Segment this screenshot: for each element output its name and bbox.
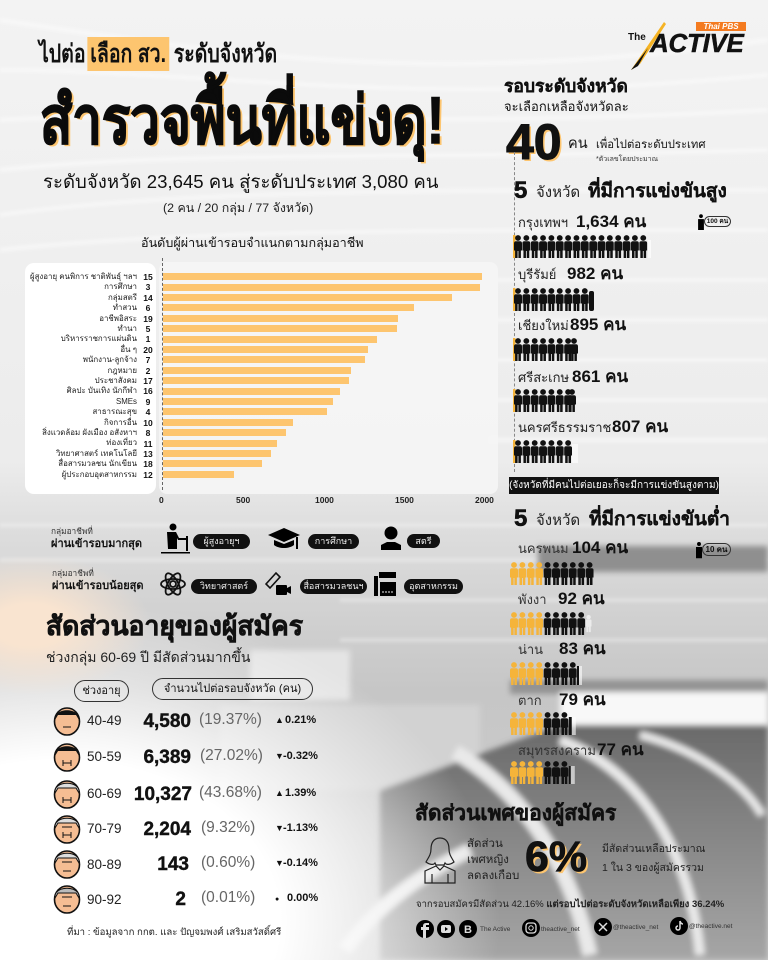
chart category labels: กิจการอื่น — [104, 418, 137, 427]
panel: label card — [25, 263, 156, 494]
icon: instagram — [522, 919, 540, 937]
row: Nakhon Si Thammarat: 807 คน — [612, 417, 668, 436]
change: -1.13% — [283, 822, 318, 834]
chart group numbers: 10 — [143, 418, 153, 428]
row: 90-92 — [54, 885, 318, 914]
low competition heading: จังหวัด — [536, 512, 580, 529]
chart category labels: สาธารณะสุข — [92, 407, 137, 416]
chart category labels: ผู้ประกอบอุตสาหกรรม — [62, 470, 137, 479]
change: -0.14% — [283, 857, 318, 869]
icon: blockdit — [459, 920, 477, 938]
title block — [37, 37, 444, 216]
text: share — [467, 836, 519, 884]
row: Buriram: 982 คน — [567, 264, 623, 283]
low competition heading — [514, 504, 754, 536]
change: ▼ — [275, 858, 284, 868]
legend: 100 people: 100 คน — [707, 218, 728, 225]
chart group numbers: 7 — [146, 355, 150, 365]
pill: science: วิทยาศาสตร์ — [200, 581, 248, 591]
chart group numbers — [143, 272, 153, 480]
age: 90-92 — [87, 892, 122, 907]
chart category labels: พนักงาน-ลูกจ้าง — [83, 355, 137, 364]
row: Phang Nga: พังงา — [518, 592, 547, 607]
chart group numbers: 12 — [143, 470, 153, 480]
pct: (0.60%) — [201, 854, 255, 871]
change: ▼ — [275, 823, 284, 833]
chart x axis: 0 — [159, 495, 164, 505]
legend: 100 people — [698, 214, 732, 230]
row: Samut Songkhram — [509, 737, 679, 785]
icon: woman outline — [422, 836, 458, 884]
row: Nakhon Phanom: 104 คน — [572, 538, 628, 557]
province rows low — [509, 538, 679, 788]
low competition heading: ที่มีการแข่งขันต่ำ — [589, 509, 730, 530]
age: 80-89 — [87, 857, 122, 872]
row: Tak — [509, 688, 679, 736]
row: Bangkok — [512, 210, 657, 260]
chart category labels: กลุ่มสตรี — [108, 293, 137, 302]
count: 4,580 — [143, 711, 191, 732]
pct: (0.01%) — [201, 889, 255, 906]
row: Samut Songkhram: 77 คน — [597, 740, 644, 759]
text: group note: (2 คน / 20 กลุ่ม / 77 จังหวัด) — [163, 201, 313, 215]
chart group numbers: 14 — [143, 293, 153, 303]
count: 143 — [157, 854, 189, 875]
row: Phang Nga — [509, 588, 679, 636]
pill: education: การศึกษา — [315, 536, 352, 546]
chart x axis: 500 — [236, 495, 250, 505]
high competition heading: จังหวัด — [536, 184, 580, 201]
change: 0.21% — [285, 714, 316, 726]
row: Chiang Mai — [512, 315, 657, 360]
chart group numbers: 9 — [146, 397, 150, 407]
text: ratio: มีสัดส่วนเหลือประมาณ — [602, 843, 705, 855]
column pill: count — [152, 678, 313, 700]
chart group numbers: 1 — [146, 334, 150, 344]
chart category labels: ผู้สูงอายุ คนพิการ ชาติพันธุ์ ฯลฯ — [30, 272, 137, 281]
heading: subtitle line: ไปต่อ เลือก สว. ระดับจังหวัด — [39, 40, 277, 68]
chart category labels: SMEs — [116, 397, 137, 406]
chart category labels: ท่องเที่ยว — [106, 438, 137, 447]
label: @theactive_net — [613, 924, 658, 931]
dashed axis — [514, 152, 515, 472]
heading: gender share: สัดส่วนเพศของผู้สมัคร — [415, 802, 616, 825]
chart category labels: วิทยาศาสตร์ เทคโนโลยี — [56, 449, 137, 458]
heading: main title: สำรวจพื้นที่แข่งดุ! — [40, 83, 444, 157]
icon: elderly — [161, 524, 190, 554]
note: เพื่อไปต่อระดับประเทศ — [596, 139, 706, 151]
pill: education — [308, 534, 359, 549]
chart group numbers: 15 — [143, 272, 153, 282]
pill: elderly — [193, 534, 250, 549]
chart group numbers: 11 — [144, 438, 152, 448]
count: 6,389 — [143, 747, 191, 768]
chart category labels: ประชาสังคม — [95, 376, 137, 385]
chart group numbers: 16 — [143, 386, 153, 396]
icon: x — [594, 918, 612, 936]
heading: รอบระดับจังหวัด — [504, 76, 628, 96]
chart group numbers: 13 — [143, 449, 153, 459]
age: 70-79 — [87, 821, 122, 836]
panel: most passed groups — [51, 524, 440, 554]
chart group numbers: 8 — [146, 428, 150, 438]
callout: black banner — [509, 477, 719, 494]
legend: 10 people — [696, 540, 732, 560]
column pill: count: จำนวนไปต่อรอบจังหวัด (คน) — [164, 683, 301, 695]
pct: (43.68%) — [199, 784, 262, 801]
pill: industry: อุตสาหกรรม — [409, 581, 458, 591]
chart category labels: อาชีพอิสระ — [99, 314, 137, 323]
age: 60-69 — [87, 786, 122, 801]
subheading: ช่วงกลุ่ม 60-69 ปี มีสัดส่วนมากขึ้น — [46, 649, 250, 665]
icon: factory — [374, 572, 396, 596]
age: 40-49 — [87, 713, 122, 728]
pill: women: สตรี — [415, 536, 432, 546]
chart x axis: 1500 — [395, 495, 414, 505]
icon: face — [54, 707, 80, 736]
panel: age share — [46, 611, 318, 938]
text: จะเลือกเหลือจังหวัดละ — [504, 99, 629, 114]
chart category labels: ทำนา — [118, 324, 137, 333]
footnote: *ตัวเลขโดยประมาณ — [596, 156, 658, 163]
label: ผ่านเข้ารอบน้อยสุด — [52, 580, 144, 592]
high competition heading — [514, 177, 727, 204]
white fade: lower left — [0, 600, 768, 960]
row: Sisaket — [512, 366, 657, 411]
logo active: ACTIVE — [650, 28, 744, 58]
column pill: age — [74, 680, 129, 702]
change: ▲ — [275, 715, 284, 725]
row: 70-79 — [54, 815, 318, 844]
chart title: อันดับผู้ผ่านเข้ารอบจำแนกตามกลุ่มอาชีพ — [141, 236, 364, 250]
legend: 10 people: 10 คน — [706, 545, 727, 554]
row: Chiang Mai: 895 คน — [570, 315, 626, 334]
panel: bar chart — [25, 263, 498, 494]
icon: face — [54, 885, 80, 914]
icon: woman — [381, 526, 401, 550]
row: 60-69 — [54, 780, 316, 809]
count: 2 — [175, 889, 186, 910]
high competition heading: ที่มีการแข่งขันสูง — [588, 181, 727, 202]
province rows high — [512, 210, 752, 470]
chart group numbers: 20 — [143, 345, 153, 355]
chart group numbers: 4 — [146, 407, 150, 417]
label — [52, 568, 144, 592]
row: Sisaket: 861 คน — [572, 367, 628, 386]
social row — [416, 918, 736, 942]
chart bars — [163, 273, 482, 478]
row: Buriram — [512, 265, 657, 310]
pill: elderly: ผู้สูงอายุฯ — [204, 536, 239, 546]
row: Nakhon Phanom: นครพนม — [518, 541, 569, 556]
panel: plot area — [159, 262, 498, 494]
row: Nakhon Si Thammarat — [512, 417, 672, 462]
chart group numbers: 5 — [146, 324, 150, 334]
chart category labels — [30, 272, 137, 480]
row: Samut Songkhram: สมุทรสงคราม — [518, 743, 596, 758]
pill: industry — [404, 579, 463, 594]
chart category labels: การศึกษา — [104, 282, 137, 291]
chart category labels: กฎหมาย — [107, 366, 137, 375]
logo badge: Thai PBS — [703, 22, 739, 31]
row: Nan — [509, 638, 679, 686]
chart category labels: บริหารราชการแผ่นดิน — [61, 334, 137, 343]
icon: blockdit: B — [464, 924, 472, 936]
logo the: The — [628, 32, 646, 43]
logo slash — [631, 22, 666, 70]
icon: facebook — [416, 920, 434, 938]
label: กลุ่มอาชีพที่ — [51, 526, 93, 536]
chart category labels: ศิลปะ บันเทิง นักกีฬา — [67, 386, 137, 395]
chart x axis: 1000 — [315, 495, 334, 505]
row: Nan: น่าน — [518, 642, 543, 657]
icon: education — [268, 528, 300, 549]
change: 1.39% — [285, 787, 316, 799]
change: ▲ — [275, 788, 284, 798]
big number: 40 — [506, 114, 562, 170]
change: 0.00% — [287, 892, 318, 904]
column pill: age: ช่วงอายุ — [82, 685, 121, 697]
icon: face — [54, 815, 80, 844]
change: ● — [275, 896, 279, 903]
text: share: ลดลงเกือบ — [467, 870, 519, 882]
chart category labels: อื่น ๆ — [120, 345, 137, 354]
chart x axis: 2000 — [475, 495, 494, 505]
pct: (27.02%) — [200, 747, 263, 764]
text: detail: จากรอบสมัครมีสัดส่วน 42.16% แต่รอบไปต่อระดับจังหวัดเหลือเพียง 36.24% — [416, 899, 724, 910]
label: กลุ่มอาชีพที่ — [52, 568, 94, 578]
age: 50-59 — [87, 749, 122, 764]
row: 80-89 — [54, 850, 318, 879]
row: Sisaket: ศรีสะเกษ — [518, 370, 569, 385]
row: Phang Nga: 92 คน — [558, 589, 605, 608]
chart group numbers: 6 — [146, 303, 150, 313]
chart category labels: ทำสวน — [113, 303, 137, 312]
beige glow: left wall — [0, 555, 150, 695]
text: ratio: 1 ใน 3 ของผู้สมัครรวม — [602, 862, 704, 874]
big percent: 6% — [525, 833, 587, 881]
pct: (9.32%) — [201, 819, 255, 836]
unit: คน — [568, 136, 588, 152]
label: The Active — [480, 926, 510, 933]
change: -0.32% — [283, 750, 318, 762]
low competition heading: 5 — [514, 505, 527, 532]
text: share: สัดส่วน — [467, 838, 503, 850]
pill: mass media: สื่อสารมวลชนฯ — [303, 581, 364, 591]
text: level counts: ระดับจังหวัด 23,645 คน สู่ระดับประเทศ 3,080 คน — [43, 171, 439, 192]
chart axis line — [162, 258, 163, 490]
source: ที่มา : ข้อมูลจาก กกต. และ ปัญจมพงศ์ เสริมสวัสดิ์ศรี — [67, 927, 281, 938]
icon: youtube — [437, 920, 455, 938]
icon: face — [54, 850, 80, 879]
count: 10,327 — [134, 784, 192, 805]
pct: (19.37%) — [199, 711, 262, 728]
panel: least passed groups — [52, 568, 463, 596]
icon: face — [54, 780, 80, 809]
chart x axis — [159, 495, 494, 505]
pill: science — [191, 579, 257, 594]
chart category labels: สื่อสารมวลชน นักเขียน — [58, 459, 137, 468]
icon: atom — [160, 572, 186, 596]
row: Tak: ตาก — [518, 693, 542, 708]
row: Nakhon Si Thammarat: นครศรีธรรมราช — [518, 420, 611, 435]
count: 2,204 — [143, 819, 191, 840]
row: Nakhon Phanom — [509, 538, 679, 586]
label: @theactive.net — [689, 923, 732, 930]
icon: tiktok — [670, 917, 688, 935]
chart group numbers: 18 — [143, 459, 153, 469]
row: 40-49 — [54, 707, 316, 736]
text: ratio — [602, 840, 705, 878]
change: ▼ — [275, 751, 284, 761]
icon: microphone camera — [265, 572, 291, 595]
heading: age share: สัดส่วนอายุของผู้สมัคร — [46, 611, 303, 641]
text: share: เพศหญิง — [467, 854, 509, 866]
row: Chiang Mai: เชียงใหม่ — [518, 318, 569, 333]
pill: mass media — [300, 579, 367, 594]
logo: The Active — [628, 22, 746, 70]
row: 50-59 — [54, 743, 318, 772]
high competition heading: 5 — [514, 177, 527, 204]
chart group numbers: 3 — [146, 282, 150, 292]
chart group numbers: 19 — [143, 314, 153, 324]
row: Bangkok: กรุงเทพฯ — [518, 215, 568, 230]
row: Tak: 79 คน — [559, 690, 606, 709]
callout: black banner: (จังหวัดที่มีคนไปต่อเยอะก็จะมีการแข่งขันสูงตาม) — [509, 480, 719, 491]
chart group numbers: 2 — [146, 366, 150, 376]
chart category labels: สิ่งแวดล้อม ผังเมือง อสังหาฯ — [42, 428, 137, 437]
row: Nan: 83 คน — [559, 639, 606, 658]
chart group numbers: 17 — [143, 376, 153, 386]
label: ผ่านเข้ารอบมากสุด — [51, 538, 142, 550]
label: theactive_net — [541, 926, 580, 933]
icon: face — [54, 743, 80, 772]
row: Buriram: บุรีรัมย์ — [518, 267, 556, 282]
panel: provincial round — [504, 76, 706, 170]
panel: gender share — [414, 800, 754, 950]
label — [51, 526, 142, 550]
pill: women — [407, 534, 440, 548]
row: Bangkok: 1,634 คน — [576, 212, 646, 231]
